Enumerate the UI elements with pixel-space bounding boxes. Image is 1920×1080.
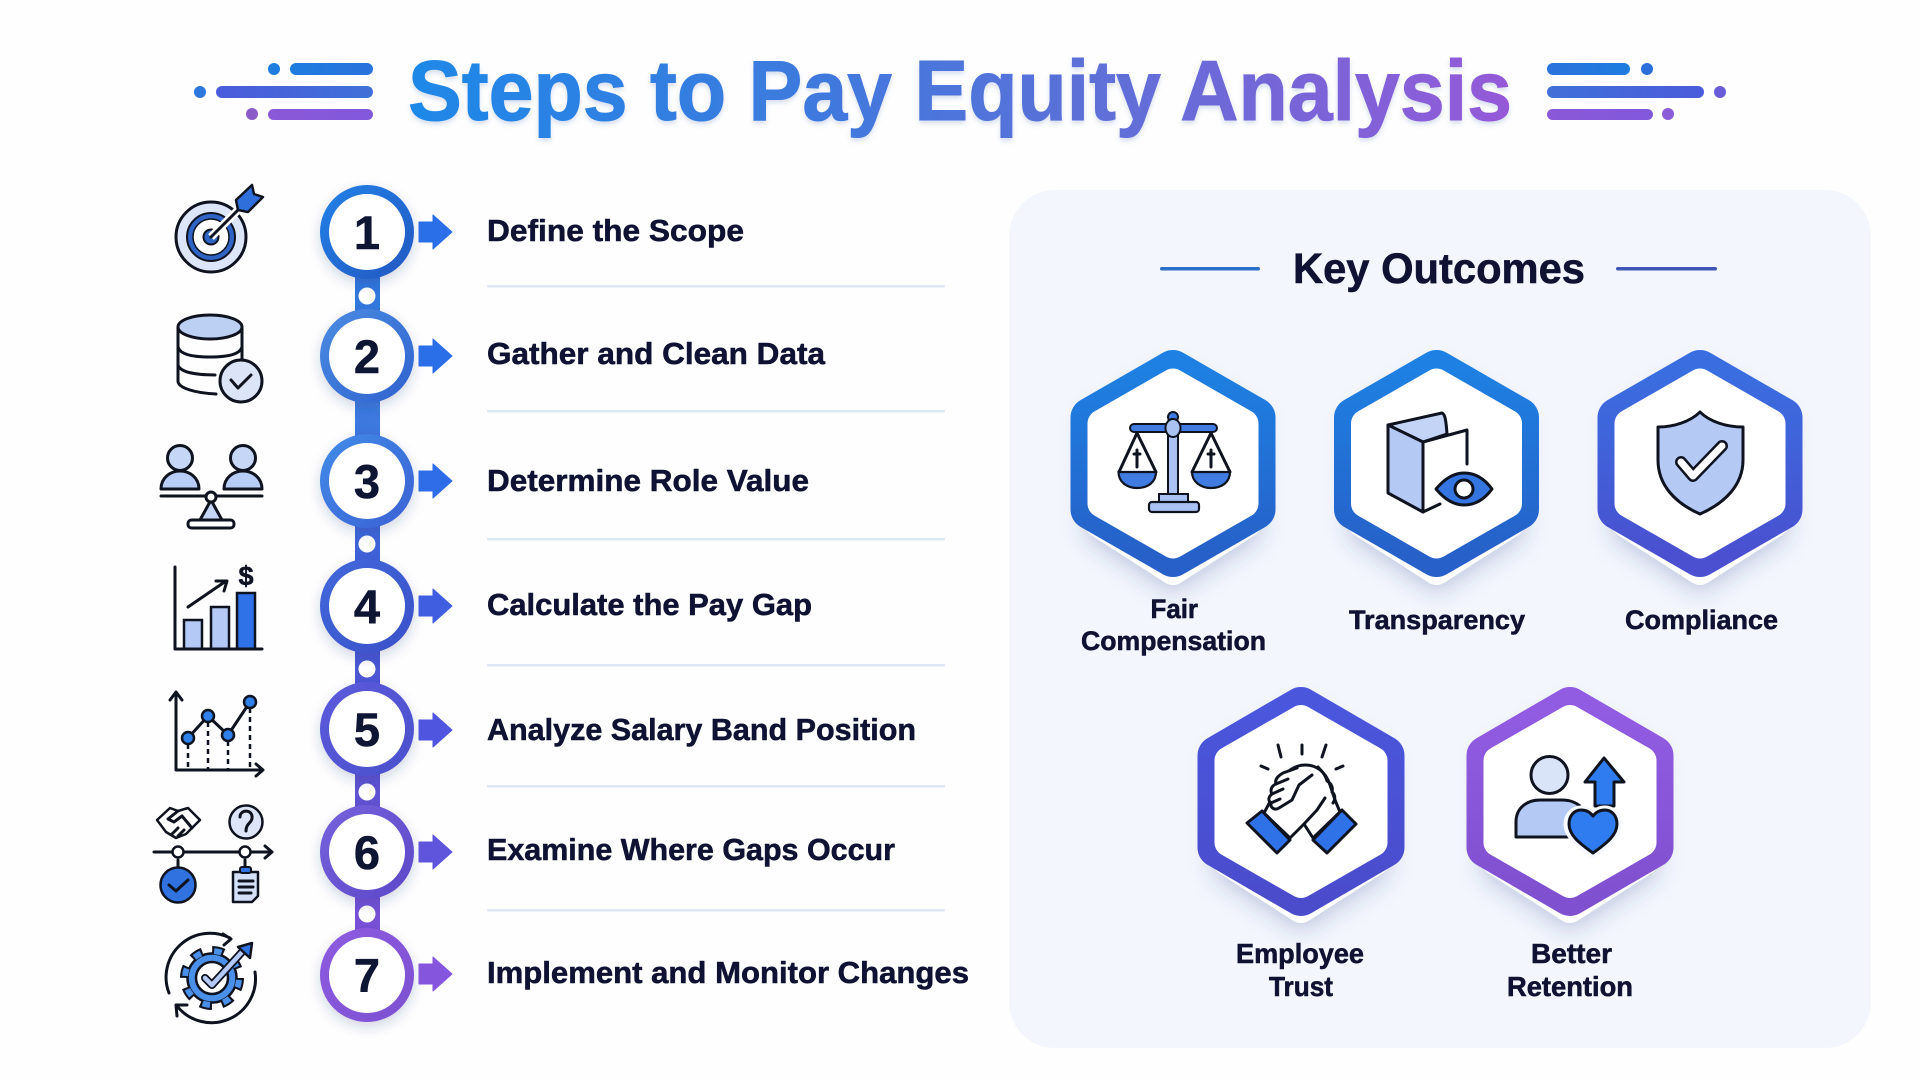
label	[1507, 938, 1633, 1002]
label 3: Determine Role Value	[487, 463, 809, 498]
number badge 3: 3	[354, 455, 380, 508]
arrow 5	[419, 713, 452, 747]
icon: people on balance	[161, 446, 262, 528]
icon: line chart	[170, 692, 263, 776]
icon: person, arrow and heart	[1516, 756, 1624, 854]
number badge 7: 7	[354, 949, 380, 1002]
icon: bar chart with dollar: $	[238, 561, 254, 591]
label 5: Analyze Salary Band Position	[487, 712, 916, 747]
label: Trust	[1269, 971, 1333, 1002]
title decoration: left speed lines	[194, 63, 373, 120]
step connector line with dots	[355, 232, 380, 975]
number badge 2: 2	[354, 330, 380, 383]
step 1	[176, 185, 744, 279]
outcome: better retention	[1486, 707, 1654, 1002]
label 7: Implement and Monitor Changes	[487, 955, 969, 990]
step 5	[170, 682, 916, 776]
icon: folded document with eye	[1388, 413, 1492, 512]
heading rule left	[1160, 267, 1260, 270]
icon: clasped hands	[1247, 745, 1356, 853]
number badge 1	[320, 185, 414, 279]
heading rule right	[1616, 267, 1717, 270]
icon: balance scales	[1118, 412, 1230, 512]
step 4	[175, 559, 812, 653]
arrow 1	[419, 215, 452, 249]
arrow 3	[419, 464, 452, 498]
step 6	[154, 805, 895, 902]
number badge 5: 5	[354, 703, 380, 756]
icon: gear with rotating arrows	[166, 933, 256, 1023]
arrow 2	[419, 339, 452, 373]
number badge 1: 1	[354, 206, 380, 259]
number badge 3	[320, 434, 414, 528]
label 4: Calculate the Pay Gap	[487, 587, 812, 622]
icon: database with check	[178, 315, 262, 402]
number badge 5	[320, 682, 414, 776]
label: Fair	[1150, 594, 1198, 624]
label 1: Define the Scope	[487, 213, 744, 248]
icon: bar chart with dollar	[175, 561, 262, 649]
label: Transparency	[1349, 605, 1525, 635]
label	[1236, 938, 1364, 1002]
arrow 6	[419, 835, 452, 869]
arrow 4	[419, 589, 452, 623]
outcome: employee trust	[1218, 707, 1384, 1002]
step 3	[161, 434, 809, 528]
number badge 7	[320, 928, 414, 1022]
label: Compliance	[1625, 605, 1778, 635]
title decoration: right speed lines	[1547, 63, 1726, 120]
outcome: transparency	[1349, 370, 1525, 635]
label 2: Gather and Clean Data	[487, 336, 826, 371]
number badge 6	[320, 805, 414, 899]
label	[1081, 594, 1266, 656]
label: Compensation	[1081, 626, 1266, 656]
panel heading: Key Outcomes	[1293, 245, 1585, 293]
step 7	[166, 928, 969, 1023]
arrow 7	[419, 957, 452, 991]
icon: shield with check	[1658, 412, 1743, 514]
outcome: fair compensation	[1081, 370, 1266, 656]
step 2	[178, 309, 826, 403]
panel: key outcomes	[1009, 190, 1871, 1048]
label: Retention	[1507, 971, 1633, 1002]
number badge 4: 4	[354, 580, 380, 633]
title: Steps to Pay Equity Analysis	[408, 44, 1512, 139]
label: Employee	[1236, 938, 1364, 969]
number badge 2	[320, 309, 414, 403]
icon: target with arrow	[176, 185, 263, 272]
number badge 6: 6	[354, 826, 380, 879]
label: Better	[1531, 938, 1612, 969]
icon: timeline with handshake, question, check, clipboard	[154, 806, 272, 902]
number badge 4	[320, 559, 414, 653]
outcome: compliance	[1618, 370, 1782, 635]
label 6: Examine Where Gaps Occur	[487, 832, 895, 867]
